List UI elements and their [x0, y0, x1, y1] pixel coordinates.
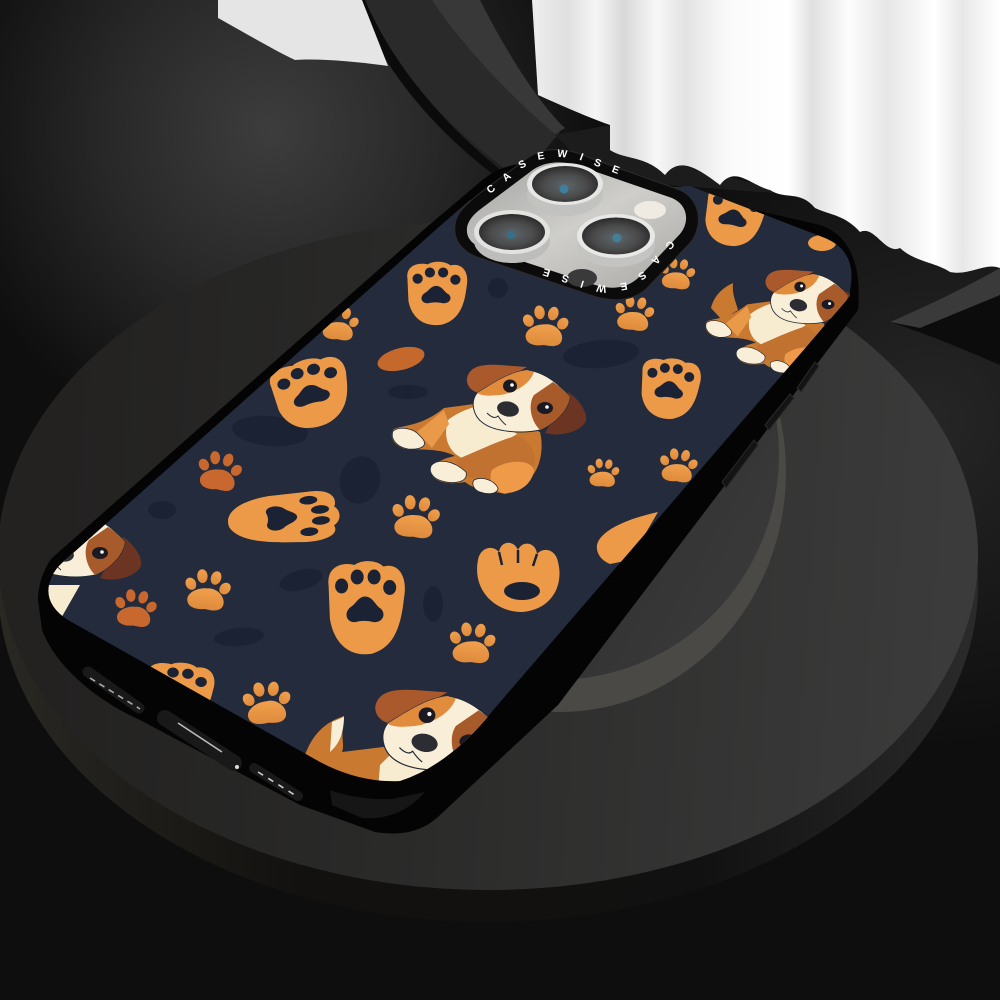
camera glass: [467, 162, 686, 288]
side buttons: [722, 362, 819, 488]
big paw: open toes: [477, 543, 560, 612]
case brand bottom: CASEWISE: [542, 242, 674, 293]
screen panel: [48, 186, 852, 782]
puppy: centre: [392, 365, 586, 494]
lens left: [474, 210, 550, 263]
microphone: [567, 269, 597, 287]
leaf: [378, 346, 424, 372]
puppy: bottom: [306, 690, 488, 782]
case side highlight: [330, 790, 425, 818]
phone case: [38, 149, 859, 834]
lens right: [577, 214, 655, 267]
camera bezel: [455, 150, 698, 300]
puppy: top right: [705, 270, 861, 373]
lens top: [527, 163, 603, 216]
dark spots: [148, 278, 640, 648]
case body: [38, 163, 859, 833]
case brand top: CASEWISE: [487, 150, 620, 192]
disc side: [0, 248, 978, 922]
curtains: [218, 0, 1000, 273]
right stand: [890, 268, 1000, 365]
small paws: [180, 255, 701, 725]
big paws: [143, 183, 836, 727]
puppy: left: [48, 524, 142, 616]
large disc: [0, 220, 978, 922]
disc top: [0, 220, 978, 890]
back arcs: [355, 0, 800, 195]
flash: [634, 201, 666, 219]
ports: [88, 672, 298, 797]
camera module: [454, 149, 699, 300]
small disc: [331, 230, 786, 712]
